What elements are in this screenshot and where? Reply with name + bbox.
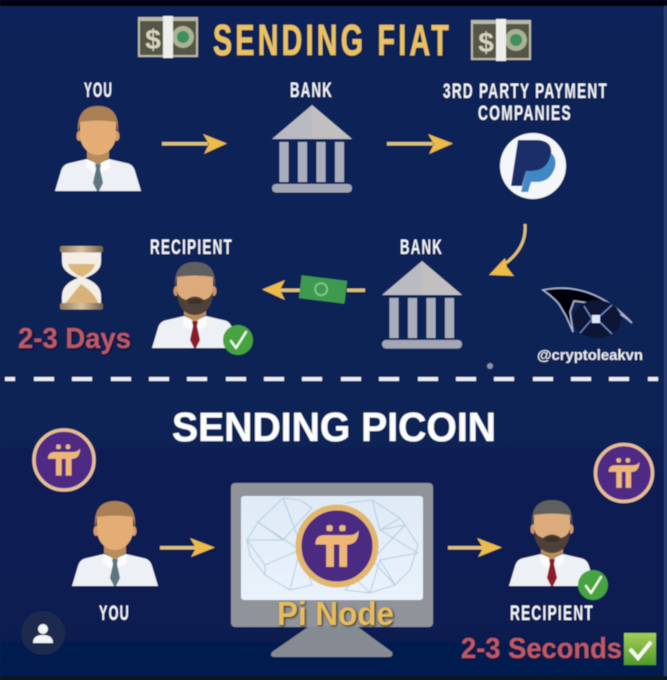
icon: arrow with banknote	[262, 275, 365, 304]
label: recipient: RECIPIENT	[150, 236, 233, 259]
text: 2-3 seconds: 2-3 Seconds	[461, 633, 622, 665]
icon: money right	[471, 19, 531, 61]
pi coin in monitor	[298, 508, 376, 584]
label: you lower: YOU	[99, 602, 130, 625]
monitor: pi node	[231, 483, 433, 657]
arrow: node to recipient	[448, 538, 502, 557]
icon: person recipient	[152, 262, 238, 348]
label: 3rd party payment companies	[443, 80, 608, 125]
icon: person you lower	[72, 501, 158, 586]
text: watermark handle: @cryptoleakvn	[537, 347, 643, 364]
monitor frame	[231, 483, 433, 627]
title: sending picoin: SENDING PICOIN	[172, 404, 496, 450]
icon: bank top	[272, 105, 352, 192]
icon: pi coin right	[596, 444, 652, 502]
arrow: you to node	[160, 538, 215, 557]
label: recipient lower: RECIPIENT	[510, 602, 594, 625]
icon: green check box	[624, 633, 656, 665]
monitor screen	[241, 496, 423, 600]
label: you: YOU	[84, 79, 113, 102]
text: pi node: Pi Node	[277, 595, 394, 632]
label: bank second: BANK	[400, 236, 443, 259]
icon: hourglass	[60, 246, 103, 310]
monitor stand	[271, 627, 392, 657]
label: bank: BANK	[290, 79, 333, 102]
icon: person you	[55, 106, 141, 191]
arrow: you to bank	[162, 134, 227, 154]
icon: check badge	[223, 325, 253, 355]
icon: money left	[138, 16, 198, 58]
icon: paypal	[500, 133, 566, 199]
icon: check badge lower	[578, 570, 608, 600]
icon: eye logo	[543, 288, 632, 338]
icon: person recipient lower	[509, 500, 595, 586]
icon: user avatar button	[21, 611, 65, 655]
icon: pi coin left	[34, 430, 94, 490]
label: 3rd party payment companies: COMPANIES	[478, 102, 572, 125]
icon: bank lower	[382, 261, 462, 348]
text: 2-3 days: 2-3 Days	[18, 323, 131, 355]
arrow: bank to payment company	[387, 134, 453, 154]
title: sending fiat: SENDING FIAT	[213, 16, 452, 65]
arrow: curved payment company to bank	[489, 224, 525, 276]
network diagram	[247, 498, 418, 593]
